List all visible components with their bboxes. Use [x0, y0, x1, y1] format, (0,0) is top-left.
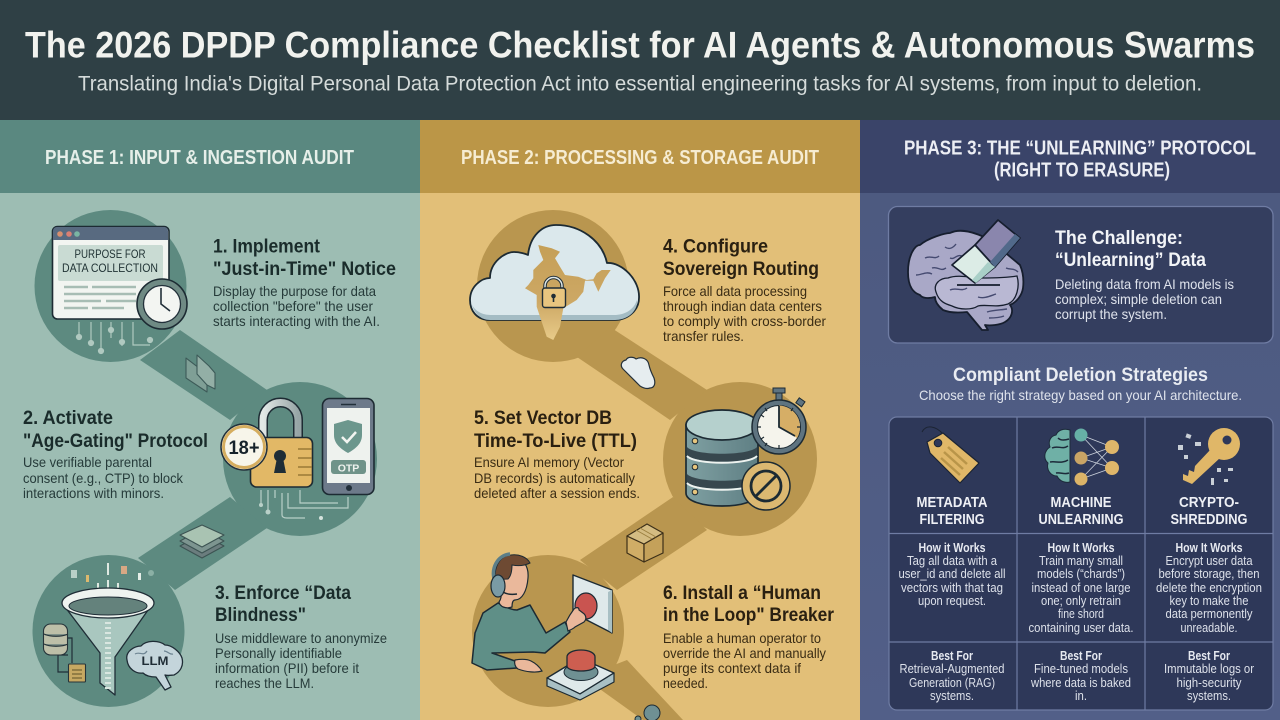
icon: notice window with clock — [52, 226, 187, 354]
heading: step 2: "Age-Gating" Protocol — [23, 430, 208, 452]
icon: padlock with 18+ badge and phone — [221, 398, 374, 520]
column 2: machine unlearning: Best For — [1060, 649, 1102, 663]
icon: anonymizing funnel with database and LLM brain — [44, 563, 183, 695]
icon: parcel box — [627, 524, 663, 562]
strategies subheading: Choose the right strategy based on your AI architecture. — [919, 387, 1242, 403]
challenge heading: “Unlearning” Data — [1055, 249, 1206, 271]
heading: step 6: in the Loop" Breaker — [663, 604, 834, 626]
icon: notice window with clock: DATA COLLECTION — [62, 263, 158, 275]
heading: step 5: 5. Set Vector DB — [474, 407, 612, 429]
column 2: machine unlearning: in. — [1075, 689, 1087, 703]
text: step 6: purge its context data if — [663, 660, 801, 676]
heading: step 5 — [474, 407, 637, 452]
column 3: crypto-shredding: key to make the — [1170, 594, 1249, 608]
heading: step 4: 4. Configure — [663, 236, 768, 258]
icon: shredded key — [1178, 428, 1240, 485]
heading: step 3: 3. Enforce “Data — [215, 582, 351, 604]
column 1: metadata filtering: Best For — [931, 649, 973, 663]
text: step 5 — [474, 454, 640, 501]
column 2: machine unlearning: Train many small — [1039, 554, 1123, 568]
column 3: crypto-shredding: data permonently — [1166, 607, 1253, 621]
strategies table — [889, 417, 1273, 710]
icon: notice window with clock: PURPOSE FOR — [74, 249, 146, 261]
column 3: crypto-shredding: unreadable. — [1180, 621, 1238, 635]
column 3: crypto-shredding: before storage, then — [1158, 567, 1260, 581]
heading: step 4: Sovereign Routing — [663, 258, 819, 280]
text: step 6 — [663, 630, 826, 691]
icon: human operator pressing breaker — [472, 554, 614, 700]
icon: data layers — [180, 525, 224, 558]
column 1: metadata filtering — [898, 494, 1006, 703]
challenge card — [888, 206, 1273, 343]
column 1: metadata filtering: upon request. — [918, 594, 986, 608]
text: step 2 — [23, 454, 184, 501]
phase 1 heading: PHASE 1: INPUT & INGESTION AUDIT — [45, 147, 354, 169]
heading: step 2: 2. Activate — [23, 407, 113, 429]
column 2: machine unlearning: Fine-tuned models — [1034, 662, 1128, 676]
column 1: metadata filtering: Generation (RAG) — [909, 676, 995, 690]
icon: small cloud — [621, 357, 655, 388]
heading: step 1 — [213, 236, 396, 280]
challenge text: Deleting data from AI models is — [1055, 276, 1234, 292]
column 1: metadata filtering: Tag all data with a — [907, 554, 997, 568]
text: step 4 — [663, 283, 826, 344]
icon: padlock with 18+ badge and phone: 18+ — [228, 437, 260, 459]
text: step 5: DB records) is automatically — [474, 470, 635, 486]
panel: phase 2 — [420, 120, 860, 720]
text: step 2: Use verifiable parental — [23, 454, 152, 470]
column 2: machine unlearning: where data is baked — [1030, 676, 1131, 690]
text: step 1 — [213, 283, 380, 329]
icon: database with stopwatch and prohibition badge — [686, 388, 806, 510]
text: step 5: Ensure AI memory (Vector — [474, 454, 624, 470]
text: step 3: reaches the LLM. — [215, 675, 314, 691]
heading: step 2 — [23, 407, 208, 452]
text: step 3 — [215, 630, 387, 691]
text: step 6: override the AI and manually — [663, 645, 826, 661]
column 3: crypto-shredding: high-security — [1176, 676, 1242, 690]
column 2: machine unlearning — [1028, 494, 1134, 703]
text: step 4: through indian data centers — [663, 298, 822, 314]
text: step 1: Display the purpose for data — [213, 283, 376, 299]
icon: padlock with 18+ badge and phone: OTP — [338, 462, 359, 474]
column 3: crypto-shredding: How It Works — [1176, 541, 1243, 555]
column 2: machine unlearning: instead of one large — [1032, 581, 1131, 595]
icon: anonymizing funnel with database and LLM brain: LLM — [142, 654, 169, 668]
text: step 3: Personally identifiable — [215, 645, 342, 661]
text: step 4: Force all data processing — [663, 283, 807, 299]
text: step 1: collection "before" the user — [213, 298, 373, 314]
text: step 4: transfer rules. — [663, 328, 744, 344]
heading: step 4 — [663, 236, 819, 280]
column 2: machine unlearning: MACHINE — [1050, 494, 1112, 511]
column 2: machine unlearning: models (“chards”) — [1037, 567, 1125, 581]
text: step 3: information (PII) before it — [215, 660, 359, 676]
column 3: crypto-shredding: SHREDDING — [1170, 511, 1248, 528]
column 3: crypto-shredding: Immutable logs or — [1164, 662, 1254, 676]
column 1: metadata filtering: METADATA — [916, 494, 988, 511]
phase 3 heading: (RIGHT TO ERASURE) — [994, 160, 1170, 182]
challenge heading — [1055, 227, 1206, 271]
text: step 2: interactions with minors. — [23, 485, 164, 501]
column 2: machine unlearning: one; only retrain — [1041, 594, 1121, 608]
challenge text: complex; simple deletion can — [1055, 291, 1222, 307]
text: step 6: Enable a human operator to — [663, 630, 821, 646]
text: step 2: consent (e.g., CTP) to block — [23, 470, 184, 486]
heading: step 3: Blindness" — [215, 604, 306, 626]
column 3: crypto-shredding: Encrypt user data — [1166, 554, 1253, 568]
column 2: machine unlearning: containing user data. — [1028, 621, 1134, 635]
column 1: metadata filtering: FILTERING — [920, 511, 984, 528]
column 3: crypto-shredding: delete the encryption — [1156, 581, 1262, 595]
column 3: crypto-shredding: systems. — [1187, 689, 1231, 703]
strategies heading: Compliant Deletion Strategies — [953, 364, 1208, 386]
heading: step 6: 6. Install a “Human — [663, 582, 821, 604]
icon: pebbles — [635, 705, 660, 720]
column 3: crypto-shredding: CRYPTO- — [1179, 494, 1239, 511]
challenge text — [1055, 276, 1234, 322]
column 2: machine unlearning: How It Works — [1048, 541, 1115, 555]
icon: machine unlearning — [1045, 428, 1119, 486]
challenge text: corrupt the system. — [1055, 306, 1167, 322]
phase 3 heading — [904, 138, 1256, 182]
column 1: metadata filtering: user_id and delete all — [898, 567, 1006, 581]
heading: step 5: Time-To-Live (TTL) — [474, 430, 637, 452]
heading: step 1: 1. Implement — [213, 236, 320, 258]
column 2: machine unlearning: UNLEARNING — [1038, 511, 1124, 528]
winding path phase 1 — [32, 210, 377, 707]
text: step 5: deleted after a session ends. — [474, 485, 640, 501]
icon: documents — [186, 355, 215, 392]
icon: metadata tag — [922, 427, 979, 483]
column 3: crypto-shredding — [1156, 494, 1262, 703]
header banner — [0, 0, 1280, 120]
column 1: metadata filtering: systems. — [930, 689, 974, 703]
panel: phase 3 — [860, 120, 1280, 720]
icon: brain with eraser — [908, 220, 1023, 330]
text: step 3: Use middleware to anonymize — [215, 630, 387, 646]
text: step 1: starts interacting with the AI. — [213, 313, 380, 329]
heading: step 6 — [663, 582, 834, 626]
subtitle: Translating India's Digital Personal Data Protection Act into essential engineering tasks for AI systems, from input to deletion. — [78, 72, 1202, 96]
heading: step 1: "Just-in-Time" Notice — [213, 258, 396, 280]
column 1: metadata filtering: vectors with that tag — [901, 581, 1003, 595]
icon: cloud with India map and lock — [470, 225, 639, 340]
challenge heading: The Challenge: — [1055, 227, 1183, 249]
column 3: crypto-shredding: Best For — [1188, 649, 1230, 663]
phase 2 heading: PHASE 2: PROCESSING & STORAGE AUDIT — [461, 147, 819, 169]
column 1: metadata filtering: Retrieval-Augmented — [900, 662, 1005, 676]
column 1: metadata filtering: How it Works — [918, 541, 986, 555]
text: step 6: needed. — [663, 675, 708, 691]
winding path phase 2 — [472, 210, 817, 720]
text: step 4: to comply with cross-border — [663, 313, 826, 329]
heading: step 3 — [215, 582, 351, 626]
panel: phase 1 — [0, 120, 420, 720]
column 2: machine unlearning: fine shord — [1058, 607, 1104, 621]
